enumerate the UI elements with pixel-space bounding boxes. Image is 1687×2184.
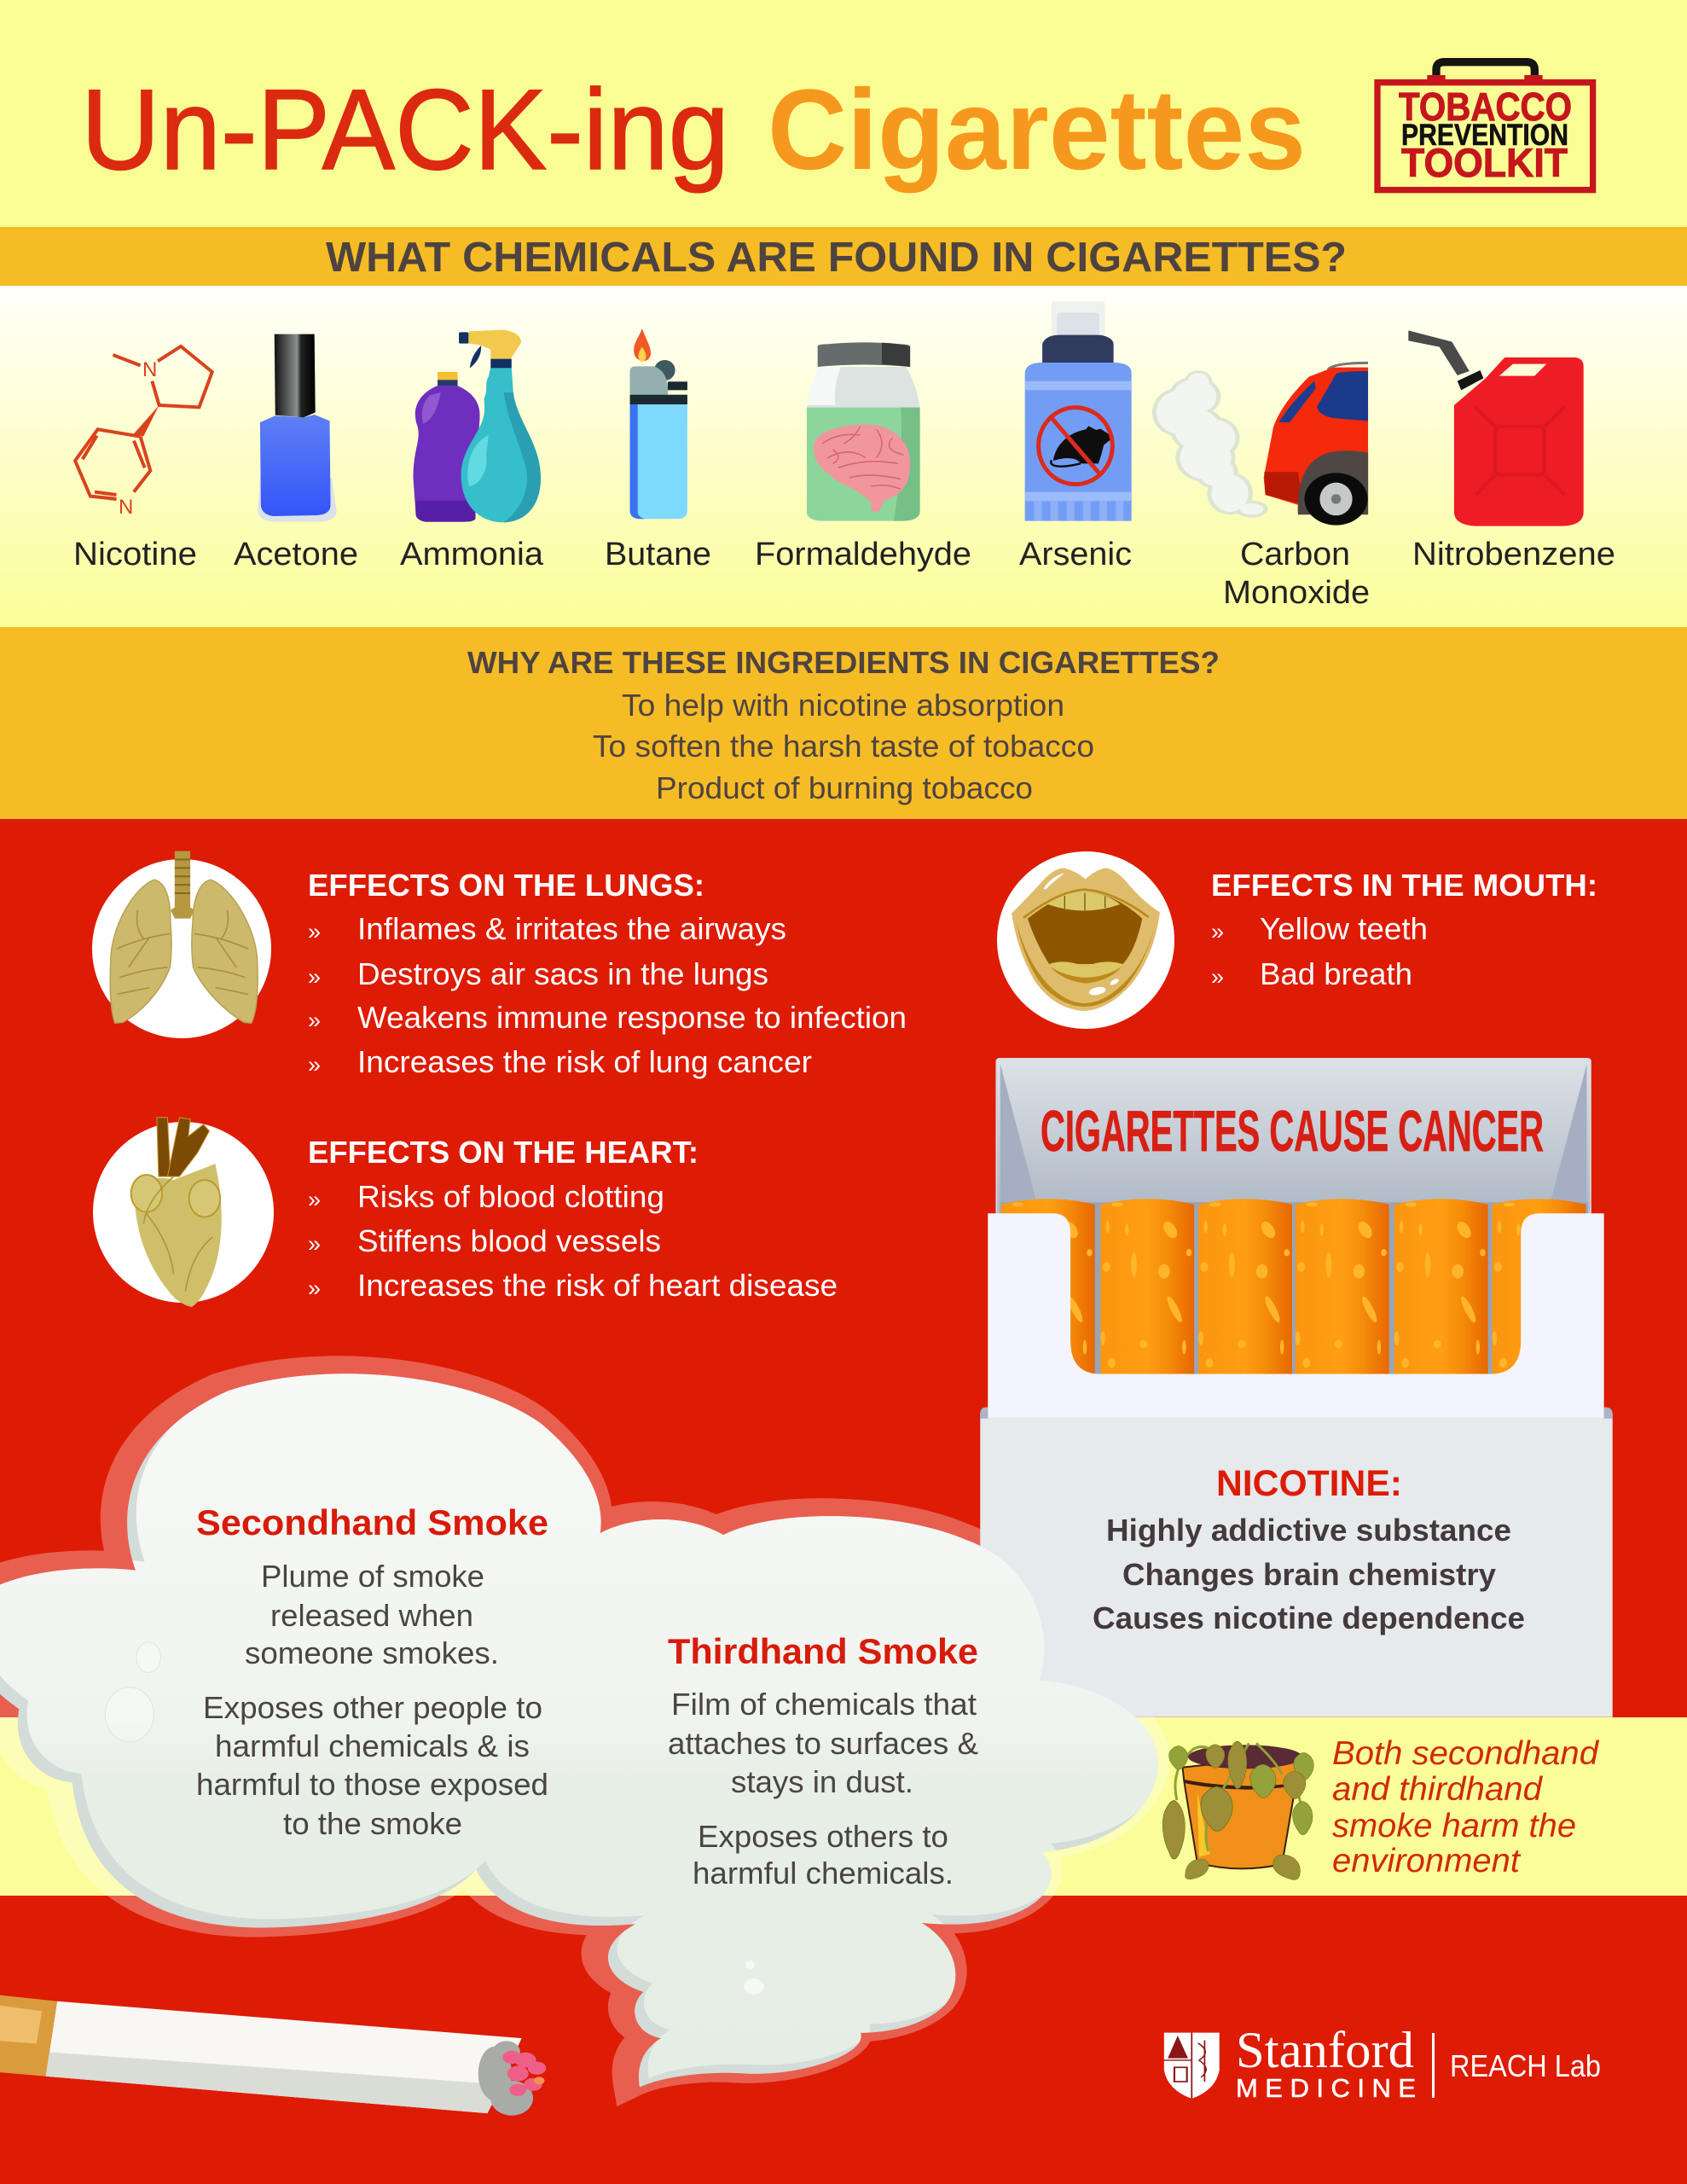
panel: why these ingredients: To help with nicotine absorption [622,688,1064,723]
text: effects in the mouth: » [1211,964,1224,990]
text: secondhand smoke: harmful to those exposed [196,1767,548,1802]
text: secondhand smoke [196,1502,548,1841]
text: effects on the heart: Stiffens blood vessels [357,1223,661,1258]
text: environment callout: Both secondhand [1332,1735,1599,1772]
icon: lighter [630,328,687,519]
text: nicotine facts: NICOTINE: [1216,1463,1402,1504]
text: effects in the mouth: » [1211,919,1224,944]
cloud halo [0,1369,1151,2083]
panel: chemicals background [0,286,1687,627]
text: thirdhand smoke: Thirdhand Smoke [668,1631,978,1671]
icon: gas can [1408,330,1584,526]
chemical labels: Acetone [234,537,358,572]
title: Un-PACK-ing [81,67,729,194]
panel: why these ingredients: To soften the harsh taste of tobacco [593,729,1094,764]
icon: ammonia bottles [413,330,541,522]
section bar: what chemicals [0,227,1687,286]
header band [0,0,1687,227]
text: effects on the heart: Risks of blood clotting [357,1179,664,1214]
icon: car exhaust [1152,363,1371,526]
text: nicotine facts: Causes nicotine dependence [1093,1600,1525,1635]
chemical labels: Formaldehyde [755,537,971,572]
text: thirdhand smoke: Film of chemicals that [671,1687,977,1722]
text: effects on the lungs: » [308,1052,321,1077]
text: effects on the lungs: Increases the risk of lung cancer [357,1044,812,1079]
icon: nicotine molecule: N [119,496,133,519]
chemical labels: Monoxide [1223,575,1370,611]
smoke cloud [0,1365,1168,2088]
logo: Tobacco Prevention Toolkit: TOBACCO [1399,84,1572,129]
text: secondhand smoke: someone smokes. [245,1635,499,1670]
text: thirdhand smoke [668,1631,978,1891]
text: thirdhand smoke: harmful chemicals. [693,1856,954,1891]
logo: Tobacco Prevention Toolkit: TOOLKIT [1401,140,1568,185]
text: thirdhand smoke: attaches to surfaces & [668,1726,978,1761]
illustration: cigarette [0,1995,546,2116]
text: effects on the heart: » [308,1187,321,1212]
logo: Tobacco Prevention Toolkit [1377,62,1593,190]
title: Cigarettes [768,67,1306,194]
text: effects on the lungs: Weakens immune response to infection [357,1000,907,1035]
title [81,67,1306,194]
text: nicotine facts [1093,1463,1525,1635]
text: nicotine facts: Changes brain chemistry [1122,1557,1496,1592]
text: effects on the lungs: Destroys air sacs in the lungs [357,956,768,991]
text: effects on the lungs: Inflames & irritates the airways [357,911,786,946]
yellow strip [0,1717,1687,1896]
text: effects on the lungs: » [308,964,321,990]
chemical labels: Ammonia [400,537,544,572]
icon: mouth [997,851,1174,1029]
text: effects on the lungs [308,868,907,1079]
icon: nicotine molecule: N [142,358,157,381]
panel: why these ingredients: Product of burning tobacco [656,770,1033,805]
text: effects in the mouth: EFFECTS IN THE MOUTH: [1211,868,1597,903]
text: effects in the mouth: Bad breath [1260,956,1412,991]
text: effects on the heart [308,1135,838,1303]
panel: why these ingredients [0,627,1687,819]
text: effects in the mouth [1211,868,1597,991]
text: effects on the heart: EFFECTS ON THE HEART: [308,1135,699,1170]
chemical labels: Butane [605,537,711,572]
text: nicotine facts: Highly addictive substance [1106,1513,1511,1548]
text: environment callout: and thirdhand [1332,1771,1543,1808]
text: secondhand smoke: to the smoke [283,1806,462,1841]
text: effects on the heart: » [308,1231,321,1257]
text: thirdhand smoke: stays in dust. [731,1764,913,1799]
logo: Stanford Medicine REACH Lab: REACH Lab [1450,2048,1601,2083]
cigarette pack [980,1059,1613,1717]
logo: Stanford Medicine REACH Lab: MEDICINE [1236,2073,1416,2103]
icon: nicotine molecule [75,346,212,519]
text: effects on the lungs: » [308,1008,321,1033]
text: thirdhand smoke: Exposes others to [698,1819,948,1854]
icon: wilted plant [1162,1741,1313,1885]
chemical labels: Nicotine [73,537,197,572]
text: secondhand smoke: Plume of smoke [261,1559,484,1594]
text: environment callout: smoke harm the [1332,1808,1576,1844]
icon: lungs [92,851,271,1038]
text: secondhand smoke: Secondhand Smoke [196,1502,548,1542]
text: secondhand smoke: released when [270,1598,473,1633]
text: effects on the heart: Increases the risk of heart disease [357,1268,838,1303]
chemical labels: Carbon [1240,537,1350,572]
text: environment callout: environment [1332,1843,1522,1879]
logo: Stanford Medicine REACH Lab: Stanford [1236,2022,1414,2078]
icon: nail polish [258,334,337,522]
text: effects on the lungs: EFFECTS ON THE LUNGS: [308,868,704,903]
section bar: what chemicals: WHAT CHEMICALS ARE FOUND IN CIGARETTES? [326,235,1347,281]
chemical labels: Arsenic [1019,537,1132,572]
chemical labels: Nitrobenzene [1412,537,1615,572]
text: effects on the heart: » [308,1275,321,1301]
icon: rat poison bottle [1025,301,1132,521]
logo: Tobacco Prevention Toolkit: PREVENTION [1401,119,1568,152]
panel: why these ingredients: WHY ARE THESE INGREDIENTS IN CIGARETTES? [467,645,1220,680]
icon: brain in jar [807,342,920,521]
chemical labels [73,537,1615,611]
text: effects on the lungs: » [308,919,321,944]
text: secondhand smoke: harmful chemicals & is [215,1728,530,1763]
text: effects in the mouth: Yellow teeth [1260,911,1428,946]
text: secondhand smoke: Exposes other people to [203,1690,542,1725]
logo: Stanford Medicine REACH Lab [1164,2022,1601,2103]
icon: heart [93,1118,274,1307]
text: environment callout [1332,1735,1599,1879]
